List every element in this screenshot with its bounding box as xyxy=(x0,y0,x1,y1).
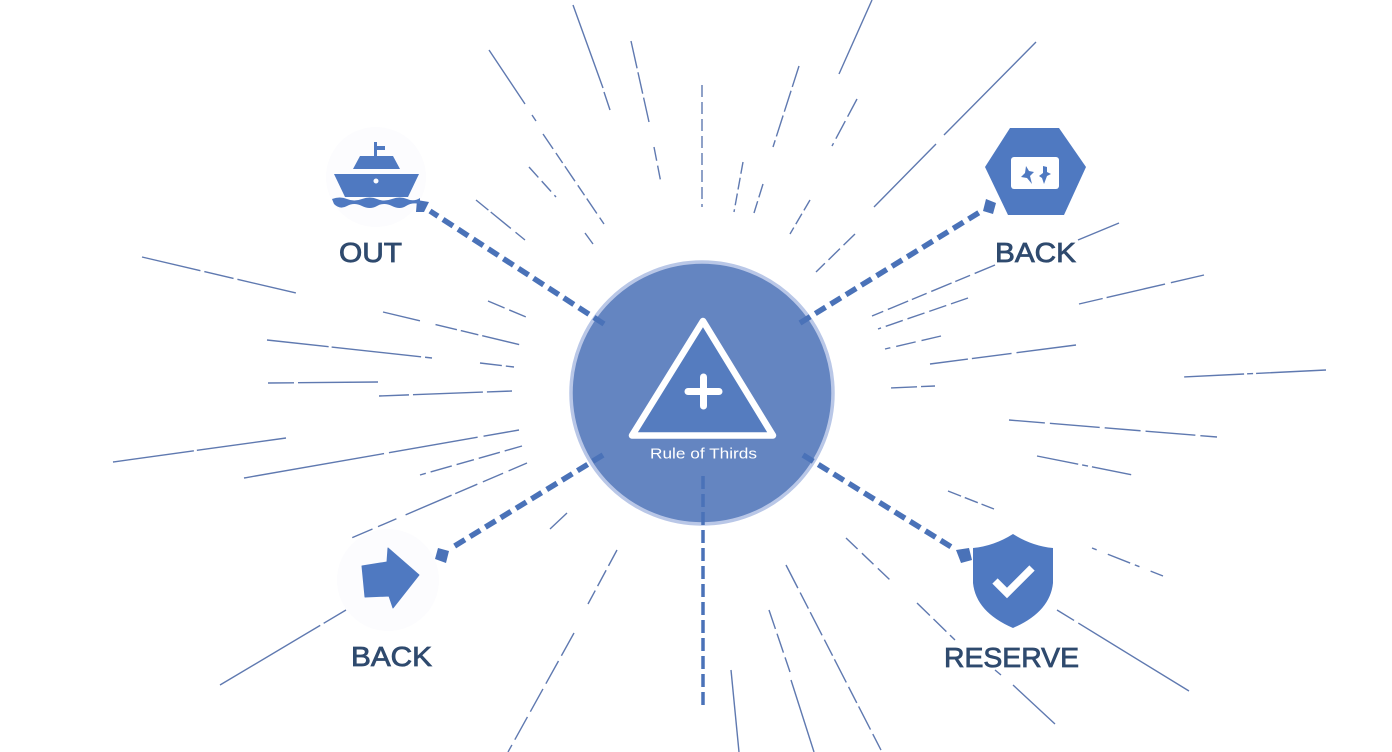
icon halo: arrow xyxy=(337,529,439,631)
arrow: centre to BACK bottom left xyxy=(435,455,603,563)
arrow: centre to BACK top right xyxy=(800,199,996,323)
icon: arrow xyxy=(362,548,419,608)
label: BACK bottom left: BACK xyxy=(351,641,432,672)
icon: triangle with plus xyxy=(632,321,773,436)
central circle xyxy=(571,262,833,524)
arrow: centre to OUT xyxy=(416,200,604,324)
label: OUT: OUT xyxy=(339,237,402,268)
label: RESERVE: RESERVE xyxy=(944,642,1079,673)
icon: hexagon with pins xyxy=(985,128,1086,215)
icon: shield with check xyxy=(973,534,1053,628)
arrow: centre downward xyxy=(701,476,705,710)
arrow: centre to RESERVE xyxy=(803,455,972,563)
icon halo: ship xyxy=(326,127,426,227)
label: BACK top right: BACK xyxy=(995,237,1076,268)
icon: ship xyxy=(332,142,420,208)
central label: Rule of Thirds xyxy=(650,446,757,462)
